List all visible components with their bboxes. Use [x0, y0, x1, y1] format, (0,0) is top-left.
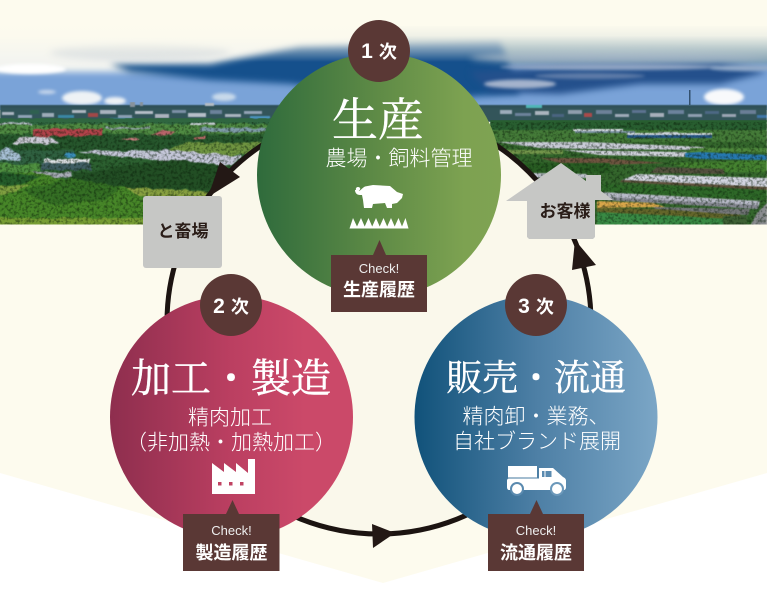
badge: primary — [348, 20, 410, 82]
house: customers: お客様 — [540, 201, 590, 221]
arrowhead: to customers — [572, 240, 596, 270]
heading: production: 生産 — [332, 95, 424, 146]
badge: tertiary: 3 次 — [518, 295, 554, 318]
callout: distribution history: Check! — [516, 523, 556, 538]
callout: manufacturing history: Check! — [211, 523, 252, 538]
panel: tertiary sales and distribution — [414, 296, 658, 538]
icon: factory — [212, 459, 255, 494]
subtext: meat processing: 精肉加工 — [188, 406, 272, 430]
callout: manufacturing history: 製造履歴 — [196, 543, 268, 563]
callout: production history: Check! — [359, 261, 399, 276]
photo right fields — [490, 120, 767, 226]
badge: secondary — [200, 274, 262, 336]
photo left fields — [0, 118, 271, 224]
subtext: non-heated and heated processing: （非加熱・加熱加工） — [126, 432, 336, 454]
ring interior — [167, 110, 591, 534]
arrowhead: to sales — [372, 524, 395, 548]
arrowhead: to slaughterhouse — [208, 162, 240, 197]
badge: secondary: 2 次 — [213, 295, 249, 318]
icon: grass — [350, 218, 408, 228]
photo top fade — [0, 24, 767, 62]
callout: production history — [331, 240, 427, 312]
photo: Okinawan farmland under a stormy sky — [0, 20, 767, 238]
slaughterhouse box: と畜場 — [158, 222, 208, 241]
icon: truck — [507, 466, 566, 496]
callout: distribution history: 流通履歴 — [500, 543, 572, 563]
subtext: farm and feed management: 農場・飼料管理 — [326, 148, 472, 170]
heading: sales and distribution: 販売・流通 — [446, 358, 626, 398]
badge: tertiary — [505, 274, 567, 336]
photo sky and clouds — [0, 32, 767, 110]
subtext: meat wholesale and business use: 精肉卸・業務、 — [462, 406, 610, 428]
heading: processing and manufacturing: 加工・製造 — [131, 356, 331, 401]
photo texture — [0, 122, 767, 225]
callout: manufacturing history — [183, 500, 280, 571]
photo town band — [0, 102, 767, 122]
panel: primary production — [257, 53, 501, 297]
panel: secondary processing — [110, 296, 353, 538]
slaughterhouse box — [143, 196, 222, 268]
subtext: own brand development: 自社ブランド展開 — [453, 430, 621, 454]
cycle ring with arrows — [167, 110, 596, 548]
house: customers — [506, 163, 613, 239]
icon: pig — [355, 185, 403, 208]
badge: primary: 1 次 — [361, 40, 397, 63]
callout: production history: 生産履歴 — [343, 280, 415, 300]
callout: distribution history — [488, 500, 584, 571]
